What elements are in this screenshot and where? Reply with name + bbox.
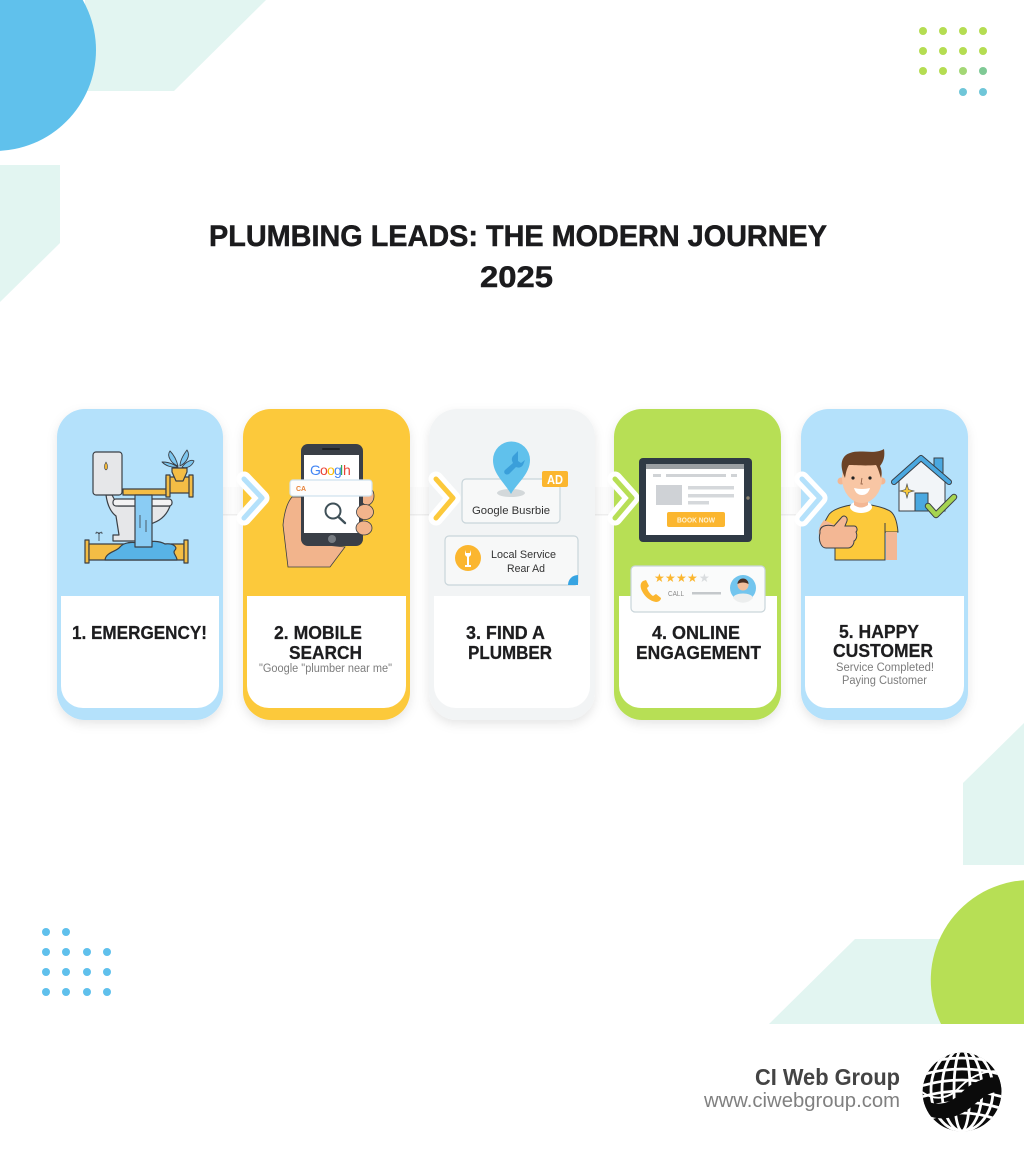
icon: tablet with booking page [639, 458, 752, 542]
Google wordmark: g [334, 462, 342, 478]
star rating: ★ [676, 571, 687, 585]
panel: step 1 emergency [57, 409, 223, 720]
panel: step 5 happy customer [801, 409, 968, 720]
callout: call and review card [631, 566, 765, 612]
title: 2025 [480, 261, 553, 294]
heading: step 3: PLUMBER [468, 643, 552, 663]
label: call: CALL [668, 589, 684, 598]
caption: step 5 [836, 662, 934, 687]
Google wordmark: o [320, 462, 328, 478]
badge: AD: AD [547, 472, 563, 487]
heading: step 3 [466, 623, 552, 663]
Google wordmark [310, 462, 351, 478]
icon: avatar [730, 575, 756, 603]
footer brand text: www.ciwebgroup.com [703, 1090, 900, 1112]
Google wordmark: l [340, 462, 343, 478]
heading: step 5: CUSTOMER [833, 641, 933, 661]
footer brand text [703, 1064, 900, 1112]
Google wordmark: h [343, 462, 351, 478]
footer brand text: CI Web Group [755, 1064, 900, 1090]
listing card: local service ad [445, 536, 578, 585]
caption: step 5: Service Completed! [836, 662, 934, 674]
listing card: local service ad: Rear Ad [507, 563, 545, 575]
panel: step 3 find a plumber [429, 409, 595, 720]
connector band [215, 487, 815, 516]
decorative dots: top right [919, 27, 987, 96]
panel: step 4 online engagement [614, 409, 781, 720]
title: PLUMBING LEADS: THE MODERN JOURNEY [209, 220, 827, 253]
caption: step 5: Paying Customer [842, 675, 927, 687]
icon: leaking toilet and pipes [85, 450, 194, 563]
badge: AD [542, 471, 568, 487]
heading: step 4: ENGAGEMENT [636, 643, 761, 663]
decorative shape: top-left blue circle [0, 0, 96, 151]
decorative shape: top-left mint [85, 0, 266, 91]
star rating [654, 571, 710, 585]
icon: phone [641, 580, 661, 602]
caption: step 2: "Google "plumber near me" [259, 663, 392, 675]
decorative shape: bottom-right green circle [931, 880, 1024, 1024]
heading: step 1: 1. EMERGENCY! [72, 623, 207, 643]
listing card: Google business [462, 479, 560, 523]
decorative shape: left mint [0, 165, 60, 302]
arrow: step 1 to 2 [244, 479, 262, 518]
heading: step 4 [636, 623, 761, 663]
star rating: ★ [687, 571, 698, 585]
arrow: step 3 to 4 [615, 479, 632, 518]
heading: step 5: 5. HAPPY [839, 622, 919, 642]
decorative dots: bottom left [42, 928, 111, 996]
title [209, 220, 827, 294]
star rating: ★ [665, 571, 676, 585]
heading: step 2: 2. MOBILE [274, 623, 362, 643]
icon: happy customer with thumbs up [819, 449, 954, 560]
Google wordmark: o [327, 462, 335, 478]
heading: step 2: SEARCH [289, 643, 362, 663]
arrow: step 2 to 3 [436, 479, 453, 518]
heading: step 5 [833, 622, 933, 661]
decorative shape: right mint [963, 723, 1024, 865]
icon: hand holding phone with Google search [283, 444, 374, 567]
icon: map pin with business listing [445, 442, 578, 585]
star rating: ★ [699, 571, 710, 585]
heading: step 4: 4. ONLINE [652, 623, 740, 643]
listing card: local service ad: Local Service [491, 549, 556, 561]
listing card: Google business: Google Busrbie [472, 505, 550, 517]
heading: step 2 [274, 623, 362, 663]
arrow: step 4 to 5 [802, 479, 820, 519]
heading: step 3: 3. FIND A [466, 623, 545, 643]
panel: step 2 mobile search [243, 409, 410, 720]
star rating: ★ [654, 571, 665, 585]
icon: house with check [894, 458, 954, 515]
Google wordmark: G [310, 462, 321, 478]
decorative shape: bottom mint [769, 939, 960, 1024]
icon: hand holding phone with Google search: CA [296, 486, 306, 493]
logo: globe [920, 1049, 1004, 1132]
button: book now: BOOK NOW [677, 518, 715, 524]
